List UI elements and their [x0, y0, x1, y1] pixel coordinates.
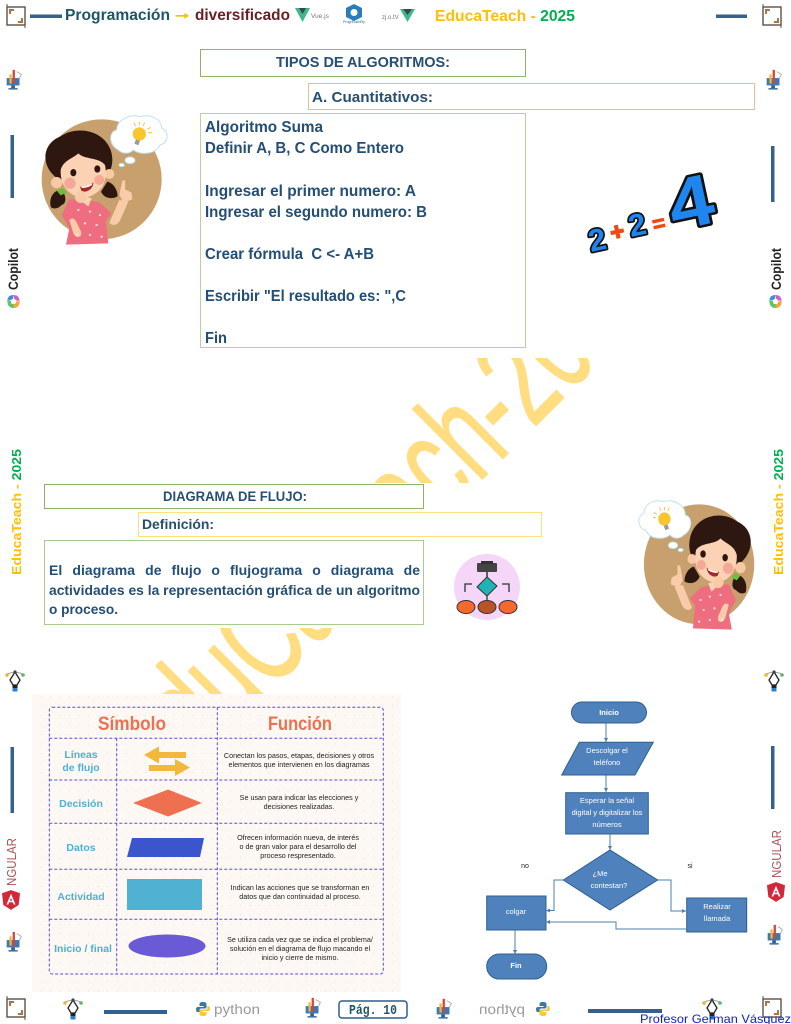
flowchart labels: contestan? — [591, 881, 627, 890]
flowchart labels: Fin — [510, 961, 522, 970]
heading box: tipos de algoritmos — [200, 50, 526, 76]
algorithm text panel: Algoritmo Suma — [205, 119, 323, 136]
heading box: definicion — [138, 512, 542, 536]
header: center logo — [343, 4, 365, 24]
header: title — [65, 6, 290, 24]
flowchart labels: digital y digitalizar los — [572, 808, 643, 817]
illustration: 2+2=4: 4 — [661, 159, 722, 247]
node: descolgar — [562, 742, 653, 775]
header: title: diversificado — [195, 7, 290, 24]
algorithm text panel: Crear fórmula C <- A+B — [205, 246, 374, 263]
row: actividad: Indican las acciones que se transforman en — [231, 883, 369, 892]
left side bars and icons: EducaTeach - 2025 — [9, 449, 24, 575]
icon: flowchart — [454, 554, 520, 620]
row: actividad: Actividad — [57, 891, 105, 903]
row: datos: o de gran valor para el desarrollo del — [239, 842, 357, 851]
flowchart labels: teléfono — [594, 758, 620, 767]
row: inicio / final: inicio y cierre de mismo. — [261, 953, 339, 962]
illustration: 2+2=4: 2 — [625, 206, 649, 244]
corner icon top-left — [7, 4, 25, 28]
flowchart example — [487, 702, 747, 979]
row: inicio / final — [54, 934, 373, 962]
header: title: Programación — [65, 7, 170, 24]
corner icon bottom-left — [7, 996, 25, 1020]
header bar left — [30, 14, 62, 18]
row: lineas de flujo: Conectan los pasos, etapas, decisiones y otros — [224, 751, 375, 760]
row: actividad — [57, 879, 369, 910]
node: realizar — [687, 898, 747, 932]
right side bars and icons: EducaTeach - 2025 — [771, 449, 786, 575]
illustration: 2+2=4: 2 — [585, 221, 609, 259]
row: datos — [66, 833, 359, 860]
row: lineas de flujo: de flujo — [62, 762, 100, 774]
flowchart labels: llamada — [704, 914, 731, 923]
header bar right — [716, 14, 747, 18]
flowchart labels: Esperar la señal — [580, 796, 634, 805]
row: datos: Ofrecen información nueva, de interés — [237, 833, 359, 842]
algorithm text panel: Definir A, B, C Como Entero — [205, 140, 404, 157]
flowchart labels: no — [521, 863, 529, 870]
row: inicio / final: solución en el diagrama de flujo macando el — [230, 944, 371, 953]
right side bars and icons: Copilot — [769, 248, 784, 290]
definition text panel: El diagrama de flujo o flujograma o diagrama de — [49, 562, 420, 578]
corner icon bottom-right — [763, 996, 781, 1020]
flowchart labels: si — [687, 863, 693, 870]
heading box: definicion: Definición: — [142, 516, 214, 532]
heading box: diagrama de flujo — [44, 484, 424, 508]
heading box: diagrama de flujo: DIAGRAMA DE FLUJO: — [163, 489, 307, 504]
algorithm text panel — [200, 114, 526, 348]
definition text panel: o proceso. — [49, 601, 118, 617]
header: title: → — [172, 6, 192, 22]
row: inicio / final: Se utiliza cada vez que se indica el problema/ — [227, 935, 373, 944]
heading box: cuantitativos: A. Cuantitativos: — [312, 89, 433, 106]
flowchart labels: Inicio — [599, 708, 619, 717]
table header: funcion: Función — [268, 714, 332, 735]
row: lineas de flujo: Líneas — [64, 749, 98, 761]
header: vue logo: Vue.js — [311, 13, 330, 20]
flowchart labels: ¿Me — [592, 869, 608, 878]
definition text panel — [44, 540, 424, 624]
row: actividad: datos que dan continuidad al proceso. — [239, 892, 361, 901]
corner icon top-right — [763, 4, 781, 28]
row: datos: Datos — [66, 842, 96, 854]
table header: simbolo: Símbolo — [98, 714, 166, 735]
flowchart labels: colgar — [506, 907, 527, 916]
node: inicio — [572, 702, 646, 723]
illustration: girl with idea, bottom — [639, 501, 754, 630]
watermark: EduCaTeach-2025 — [74, 206, 691, 823]
page number: Pág. 10 — [349, 1004, 397, 1019]
footer icons and bars: python — [479, 1001, 525, 1017]
row: decision — [59, 790, 359, 816]
row: decision: decisiones realizadas. — [264, 802, 334, 811]
flowchart labels — [506, 708, 731, 970]
definition text panel: actividades es la representación gráfica de un algoritmo — [49, 582, 420, 598]
row: datos: proceso respresentado. — [260, 851, 336, 860]
heading box: tipos de algoritmos: TIPOS DE ALGORITMOS: — [276, 54, 450, 71]
page number — [339, 1001, 407, 1019]
heading box: cuantitativos — [308, 84, 754, 110]
header: center logo: ProgrEssivEly — [343, 20, 365, 24]
left side bars and icons: NGULAR — [4, 838, 19, 886]
left side bars and icons: Copilot — [6, 248, 21, 290]
row: lineas de flujo: elementos que intervienen en los diagramas — [228, 760, 370, 769]
flowchart labels: Realizar — [703, 902, 731, 911]
right side bars and icons — [764, 70, 786, 945]
node: decision — [563, 850, 658, 910]
flowchart labels: números — [592, 820, 622, 829]
footer icons and bars — [63, 998, 722, 1020]
header: brand: EducaTeach - 2025 — [435, 8, 575, 25]
algorithm text panel: Fin — [205, 330, 227, 347]
row: decision: Se usan para indicar las elecciones y — [240, 793, 359, 802]
illustration: 2+2=4: = — [650, 210, 668, 237]
left side bars and icons — [2, 70, 25, 952]
row: decision: Decisión — [59, 798, 103, 810]
illustration: girl with idea, top — [42, 116, 167, 245]
table panel: simbolo y funcion — [32, 694, 401, 992]
algorithm text panel: Escribir "El resultado es: ",C — [205, 288, 406, 305]
node: esperar — [566, 793, 648, 834]
algorithm text panel: Ingresar el segundo numero: B — [205, 204, 427, 221]
footer icons and bars: python — [214, 1001, 260, 1017]
node: colgar — [487, 896, 546, 930]
algorithm text panel: Ingresar el primer numero: A — [205, 183, 416, 200]
illustration: 2+2=4: + — [608, 218, 627, 247]
illustration: 2+2=4 — [585, 159, 722, 259]
header: vue logo — [295, 8, 330, 22]
header: second vue logo: zj.o.tV — [382, 15, 399, 21]
row: inicio / final: Inicio / final — [54, 943, 112, 955]
header: second vue logo — [382, 9, 415, 22]
row: lineas de flujo — [62, 746, 375, 776]
node: fin — [487, 954, 547, 979]
flowchart labels: Descolgar el — [586, 746, 628, 755]
right side bars and icons: NGULAR — [769, 830, 784, 878]
